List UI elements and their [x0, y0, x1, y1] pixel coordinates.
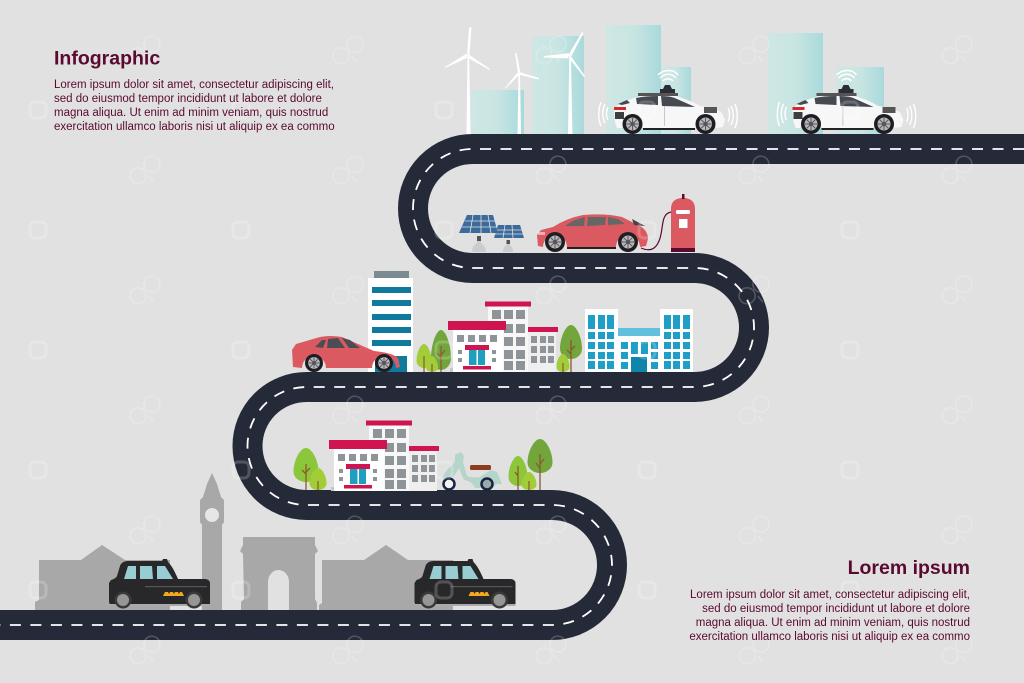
- arch silhouette: [240, 537, 318, 610]
- self-driving car 1: [599, 70, 737, 134]
- black taxi 1: [109, 559, 210, 608]
- trees beside lower building: [294, 448, 326, 490]
- red sedan: [292, 336, 400, 372]
- charging station: [641, 194, 695, 252]
- house silhouette left: [35, 545, 170, 610]
- blue glass building: [585, 309, 693, 372]
- scooter: [442, 452, 502, 490]
- solar panels: [459, 215, 524, 252]
- title: Infographic: [54, 48, 160, 70]
- red electric car: [537, 214, 648, 252]
- wind turbines: [445, 27, 585, 134]
- teal skyline: [471, 25, 884, 134]
- tree: [556, 325, 582, 372]
- house silhouette right: [319, 545, 453, 610]
- road: [0, 149, 1024, 625]
- lower text block: magna aliqua. Ut enim ad minim veniam, quis nostrud: [696, 617, 970, 629]
- intro text block: Lorem ipsum dolor sit amet, consectetur adipiscing elit,: [54, 79, 334, 91]
- lower text block: [689, 589, 970, 643]
- self-driving car 2: [777, 70, 916, 134]
- lower text block: Lorem ipsum dolor sit amet, consectetur adipiscing elit,: [690, 589, 970, 601]
- trees beside scooter: [508, 439, 552, 490]
- black taxi 2: [414, 559, 516, 608]
- intro text block: sed do eiusmod tempor incididunt ut labore et dolore: [54, 93, 322, 105]
- heading lower right: Lorem ipsum: [848, 557, 970, 579]
- clock face: [205, 508, 219, 522]
- intro text block: [54, 79, 335, 133]
- tree: [416, 330, 451, 372]
- trees and pink-roof buildings: midtown: [416, 302, 582, 372]
- office tower: [368, 271, 413, 372]
- lower pink-roof building: [329, 420, 439, 491]
- intro text block: exercitation ullamco laboris nisi ut aliquip ex ea commo: [54, 121, 335, 133]
- pink-roof building: [448, 302, 558, 372]
- clock tower silhouette: [200, 473, 224, 610]
- lower text block: sed do eiusmod tempor incididunt ut labore et dolore: [702, 603, 970, 615]
- intro text block: magna aliqua. Ut enim ad minim veniam, quis nostrud: [54, 107, 328, 119]
- city silhouettes: [35, 473, 453, 610]
- lower text block: exercitation ullamco laboris nisi ut aliquip ex ea commo: [689, 631, 970, 643]
